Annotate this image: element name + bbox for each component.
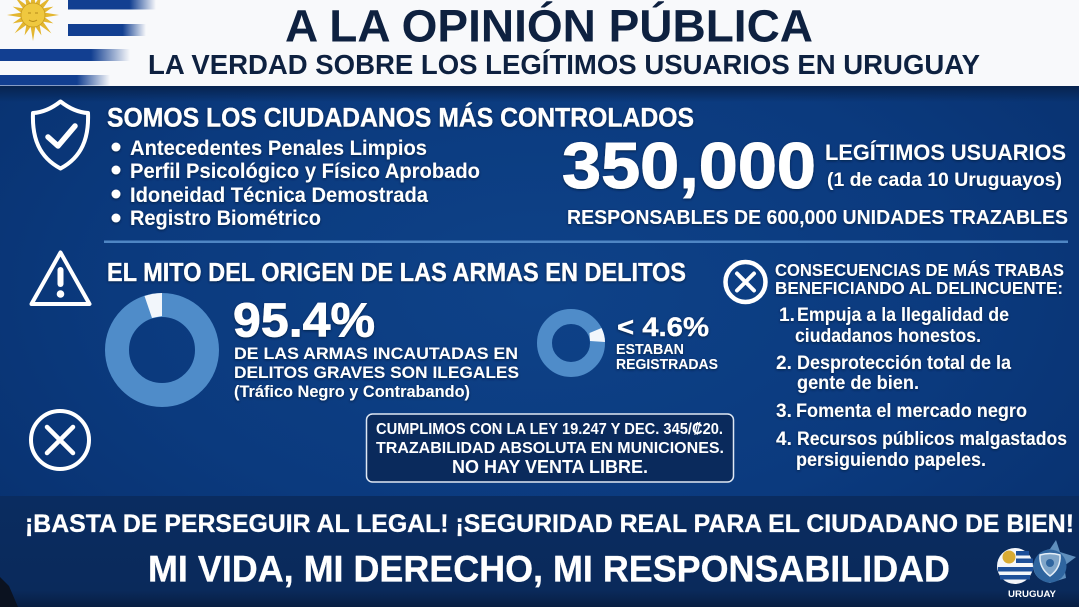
callout: legal compliance: NO HAY VENTA LIBRE.: [452, 456, 648, 477]
big number: 350,000: [562, 129, 816, 202]
bullet list: [112, 136, 480, 230]
callout: legal compliance: [366, 414, 734, 482]
heading: consequences: [775, 259, 1064, 298]
slogan line: ¡BASTA DE PERSEGUIR AL LEGAL! ¡SEGURIDAD REAL PARA EL CIUDADANO DE BIEN!: [25, 510, 1074, 538]
illegal weapons text: (Tráfico Negro y Contrabando): [234, 382, 470, 401]
illegal weapons text: [234, 345, 519, 401]
registered percentage: < 4.6%: [617, 312, 709, 342]
users note: (1 de cada 10 Uruguayos): [827, 169, 1062, 191]
heading: somos: SOMOS LOS CIUDADANOS MÁS CONTROLADOS: [107, 102, 694, 132]
numbered list: Empuja a la llegalidad de: [797, 305, 1009, 326]
heading: consequences: BENEFICIANDO AL DELINCUENTE:: [775, 278, 1063, 298]
flag of Uruguay: [0, 0, 156, 86]
numbered list: Fomenta el mercado negro: [796, 401, 1027, 422]
donut chart: 95.4%: [117, 293, 207, 395]
numbered list: gente de bien.: [797, 373, 919, 394]
illegal weapons text: DE LAS ARMAS INCAUTADAS EN: [234, 345, 518, 363]
big percentage: 95.4%: [233, 294, 375, 348]
bullet list: Perfil Psicológico y Físico Aprobado: [130, 159, 480, 183]
panel: origin of weapons: [32, 252, 718, 401]
illegal weapons text: DELITOS GRAVES SON ILEGALES: [234, 364, 519, 382]
panel: consequences: [726, 259, 1067, 471]
panel: controlled citizens: [33, 102, 694, 230]
registered text: REGISTRADAS: [616, 356, 718, 373]
numbered list: ciudadanos honestos.: [795, 326, 981, 347]
icon: sun of May: [7, 0, 59, 41]
footer band: [0, 496, 1079, 607]
numbered list: Desprotección total de la: [797, 353, 1011, 374]
traceable units: RESPONSABLES DE 600,000 UNIDADES TRAZABLES: [567, 207, 1068, 229]
panel: user statistics: [562, 129, 1068, 229]
numbered list: 1.: [779, 305, 795, 326]
title: A LA OPINIÓN PÚBLICA: [285, 0, 813, 52]
registered text: ESTABAN: [616, 341, 684, 358]
numbered list: 4.: [776, 429, 792, 450]
icon: crossed circle left: [31, 411, 89, 469]
numbered list: 3.: [776, 401, 792, 422]
icon: crossed circle right: [726, 262, 766, 302]
donut chart: 4.6%: [544, 316, 605, 370]
bullet list: Antecedentes Penales Limpios: [130, 136, 427, 160]
heading: consequences: CONSECUENCIAS DE MÁS TRABAS: [775, 259, 1064, 280]
callout: legal compliance: CUMPLIMOS CON LA LEY 19.247 Y DEC. 345/₡20.: [376, 421, 723, 438]
bullet list: Idoneidad Técnica Demostrada: [130, 183, 429, 207]
header band: [0, 0, 1079, 86]
callout: legal compliance: TRAZABILIDAD ABSOLUTA EN MUNICIONES.: [376, 440, 724, 457]
numbered list: [776, 305, 1067, 471]
registered text: [616, 341, 718, 373]
icon: shield with check: [33, 102, 88, 168]
users label: LEGÍTIMOS USUARIOS: [825, 140, 1066, 165]
subtitle: LA VERDAD SOBRE LOS LEGÍTIMOS USUARIOS EN URUGUAY: [148, 49, 980, 80]
icon: warning triangle: [32, 252, 90, 304]
numbered list: persiguiendo papeles.: [796, 450, 986, 471]
numbered list: 2.: [776, 353, 792, 374]
heading: mito: EL MITO DEL ORIGEN DE LAS ARMAS EN DELITOS: [107, 259, 686, 287]
motto line: MI VIDA, MI DERECHO, MI RESPONSABILIDAD: [148, 548, 950, 590]
logo: Uruguay badge: [997, 540, 1076, 600]
logo: Uruguay badge: URUGUAY: [1008, 589, 1057, 600]
bullet list: Registro Biométrico: [130, 206, 321, 230]
